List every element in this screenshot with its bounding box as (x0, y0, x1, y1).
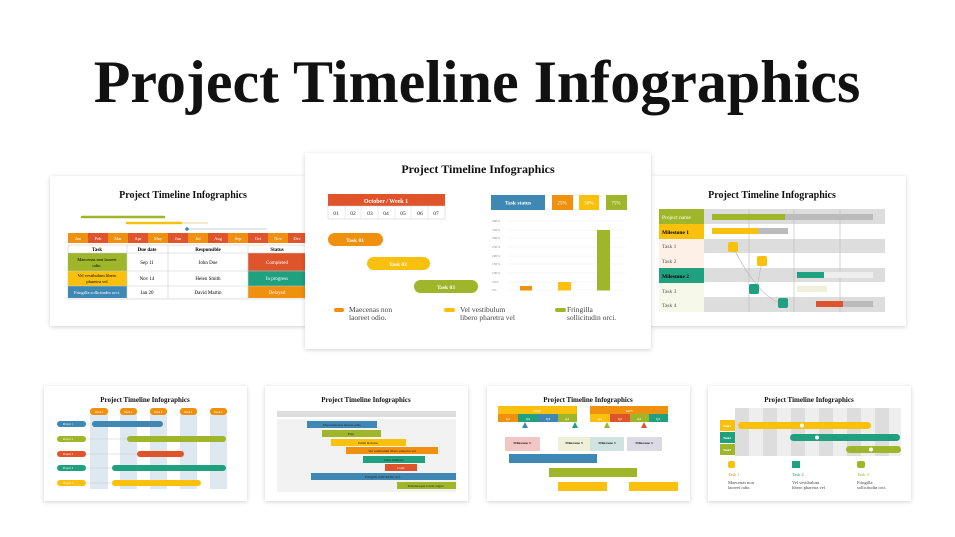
panel: bottom 3 quarters milestones: Q3 (546, 417, 550, 421)
panel: right milestone slide: Milestone 1 (662, 230, 689, 236)
panel: bottom 1 project weeks: Week 3 (154, 411, 163, 414)
months row: May (154, 236, 163, 241)
months row: Dec (293, 236, 301, 241)
panel: bottom 2 gantt bars: Maecenas non laoreet odio. (323, 423, 361, 427)
panel: left table slide (50, 176, 312, 326)
status table: In progress (266, 277, 288, 282)
panel: bottom 1 project weeks: Project 4 (63, 467, 74, 470)
calendar header: 07 (433, 211, 439, 217)
months row: Feb (95, 236, 102, 241)
calendar header: October / Week 1 (364, 199, 408, 205)
panel: right milestone slide: Task 1 (662, 244, 677, 250)
panel: bottom 2 gantt bars: Code (397, 466, 405, 470)
panel: bottom 2 gantt bars: Plan (348, 432, 354, 436)
panel: bottom 3 quarters milestones (487, 386, 690, 501)
panel: bottom 1 project weeks: Project 2 (63, 438, 74, 441)
panel: right milestone slide: Task 3 (662, 289, 677, 295)
panel: bottom 3 quarters milestones: Milestone 3 (513, 441, 531, 445)
task pills (328, 233, 478, 293)
panel: bottom 4 task tracks: Vel vestibulum (792, 480, 820, 485)
months row: Jan (75, 236, 82, 241)
panel: bottom 4 task tracks: Maecenas non (728, 480, 755, 485)
status table: Delayed (269, 291, 286, 296)
task status chart: 50% (492, 280, 498, 284)
legend: laoreet odio. (349, 313, 387, 322)
task status chart: 25% (557, 202, 567, 206)
status table: Jan 20 (141, 291, 154, 296)
panel: right milestone slide: Task 2 (662, 259, 677, 265)
months row (68, 233, 306, 243)
panel: bottom 3 quarters milestones: Milestone 3 (598, 441, 616, 445)
status table: Fringilla sollicitudin orci. (74, 290, 120, 295)
panel: right milestone slide (649, 176, 906, 326)
panel: bottom 3 quarters milestones: Q1 (506, 417, 510, 421)
panel: bottom 3 quarters milestones: Q4 (656, 417, 660, 421)
months row: Aug (214, 236, 223, 241)
panel: bottom 4 task tracks: Task2 (723, 436, 731, 440)
panel: bottom 3 quarters milestones: 2025 (626, 409, 633, 413)
legend: Maecenas non (349, 305, 392, 314)
status table: Responsible (195, 248, 222, 253)
legend (334, 305, 616, 322)
task status chart: 50% (584, 202, 594, 206)
calendar header: 05 (400, 211, 406, 217)
panel: bottom 3 quarters milestones: Q3 (637, 417, 641, 421)
panel: right milestone slide: Project name (662, 215, 691, 221)
panel: bottom 2 gantt bars (265, 386, 468, 501)
months row: Oct (255, 236, 262, 241)
legend: sollicitudin orci. (567, 313, 616, 322)
months row: Apr (134, 236, 142, 241)
panel: bottom 4 task tracks: Task 3 (857, 472, 870, 477)
status table: pharetra vel (86, 279, 108, 284)
panel: bottom 3 quarters milestones: Q2 (618, 417, 622, 421)
legend: libero pharetra vel (460, 313, 515, 322)
task status chart: 400% (492, 219, 500, 223)
status table: Helen Smith (195, 277, 221, 282)
panel: bottom 1 project weeks: Week 1 (95, 411, 104, 414)
panel: bottom 3 quarters milestones: 2024 (534, 409, 541, 413)
panel: center featured slide: Project Timeline Infographics (401, 162, 555, 176)
calendar header: 02 (350, 211, 356, 217)
panel: bottom 4 task tracks: Task1 (723, 424, 731, 428)
status table: John Doe (198, 261, 218, 266)
months row: Mar (114, 236, 122, 241)
task status chart: 300% (492, 236, 500, 240)
status table: Sep 11 (140, 261, 154, 266)
panel: bottom 3 quarters milestones: Q1 (598, 417, 602, 421)
status table: Due date (137, 248, 157, 253)
status table: David Martin (194, 291, 222, 296)
panel: bottom 1 project weeks: Project 5 (63, 482, 74, 485)
panel: bottom 4 task tracks: Fringilla (857, 480, 873, 485)
legend: Fringilla (567, 305, 594, 314)
panel: bottom 1 project weeks (44, 386, 247, 501)
status table: Status (270, 248, 284, 253)
panel: bottom 1 project weeks: Week 4 (184, 411, 193, 414)
panel: bottom 3 quarters milestones: Milestone 3 (565, 441, 583, 445)
status table: Completed (266, 261, 288, 266)
panel: bottom 4 task tracks: libero pharetra vel (792, 485, 826, 490)
status table: Task (92, 248, 102, 253)
task status chart: 75% (611, 202, 621, 206)
months row: Sep (235, 236, 242, 241)
task pills: Task 03 (437, 285, 455, 291)
panel: bottom 1 project weeks: Week 5 (214, 411, 223, 414)
panel: bottom 2 gantt bars: Pellentesque lorem augue. (408, 484, 445, 488)
panel: bottom 3 quarters milestones: Milestone 3 (635, 441, 653, 445)
panel: bottom 3 quarters milestones: Q2 (526, 417, 530, 421)
panel: left table slide: Project Timeline Infographics (119, 190, 247, 201)
task status chart (491, 195, 627, 292)
panel: bottom 1 project weeks: Week 2 (124, 411, 133, 414)
panel: bottom 1 project weeks: Project 1 (63, 423, 74, 426)
panel: bottom 4 task tracks (708, 386, 911, 501)
months row: Nov (274, 236, 283, 241)
task status chart: 100% (492, 271, 500, 275)
panel: bottom 3 quarters milestones: Q4 (565, 417, 569, 421)
months row: Jul (195, 236, 201, 241)
task status chart: 350% (492, 228, 500, 232)
calendar header: 04 (383, 211, 389, 217)
panel: bottom 4 task tracks: laoreet odio. (728, 485, 750, 490)
task pills: Task 01 (346, 238, 364, 244)
panel: bottom 1 project weeks: Project Timeline Infographics (100, 396, 190, 404)
status table (68, 245, 306, 299)
calendar header: 03 (367, 211, 373, 217)
panel: bottom 2 gantt bars: Fringilla sollicitudin orci. (365, 475, 401, 479)
panel: bottom 2 gantt bars: Initial Release (358, 441, 379, 445)
task status chart: Task status (505, 200, 531, 206)
panel: right milestone slide: Task 4 (662, 303, 677, 309)
panel: bottom 4 task tracks: Task3 (723, 448, 731, 452)
panel: center featured slide (305, 153, 651, 349)
task status chart: 250% (492, 245, 500, 249)
panel: bottom 3 quarters milestones: Project Timeline Infographics (543, 396, 633, 404)
calendar header: 01 (333, 211, 339, 217)
panel: bottom 2 gantt bars: Vel vestibulum libero pharetra vel (368, 449, 416, 453)
months row: Jun (175, 236, 182, 241)
status table: Maecenas non laoreet (77, 257, 117, 262)
task status chart: 0% (492, 288, 497, 292)
status table: odio. (92, 263, 102, 268)
calendar header (328, 194, 445, 219)
panel: bottom 4 task tracks: Task 2 (792, 472, 804, 477)
task status chart: 200% (492, 254, 500, 258)
panel: bottom 2 gantt bars: Project Timeline Infographics (321, 396, 411, 404)
panel: bottom 4 task tracks: sollicitudin orci. (857, 485, 886, 490)
title: Project Timeline Infographics (94, 49, 860, 115)
panel: bottom 4 task tracks: Task 1 (728, 472, 740, 477)
task pills: Task 02 (389, 262, 407, 268)
status table: Nov 14 (140, 277, 155, 282)
panel: bottom 2 gantt bars: Data Analysis (384, 458, 404, 462)
status table: Vel vestibulum libero (78, 273, 117, 278)
task status chart: 150% (492, 262, 500, 266)
panel: bottom 1 project weeks: Project 3 (63, 453, 74, 456)
calendar header: 06 (417, 211, 423, 217)
panel: right milestone slide: Project Timeline Infographics (708, 190, 836, 201)
legend: Vel vestibulum (460, 305, 505, 314)
panel: bottom 4 task tracks: Project Timeline Infographics (764, 396, 854, 404)
panel: right milestone slide: Milestone 2 (662, 274, 689, 280)
